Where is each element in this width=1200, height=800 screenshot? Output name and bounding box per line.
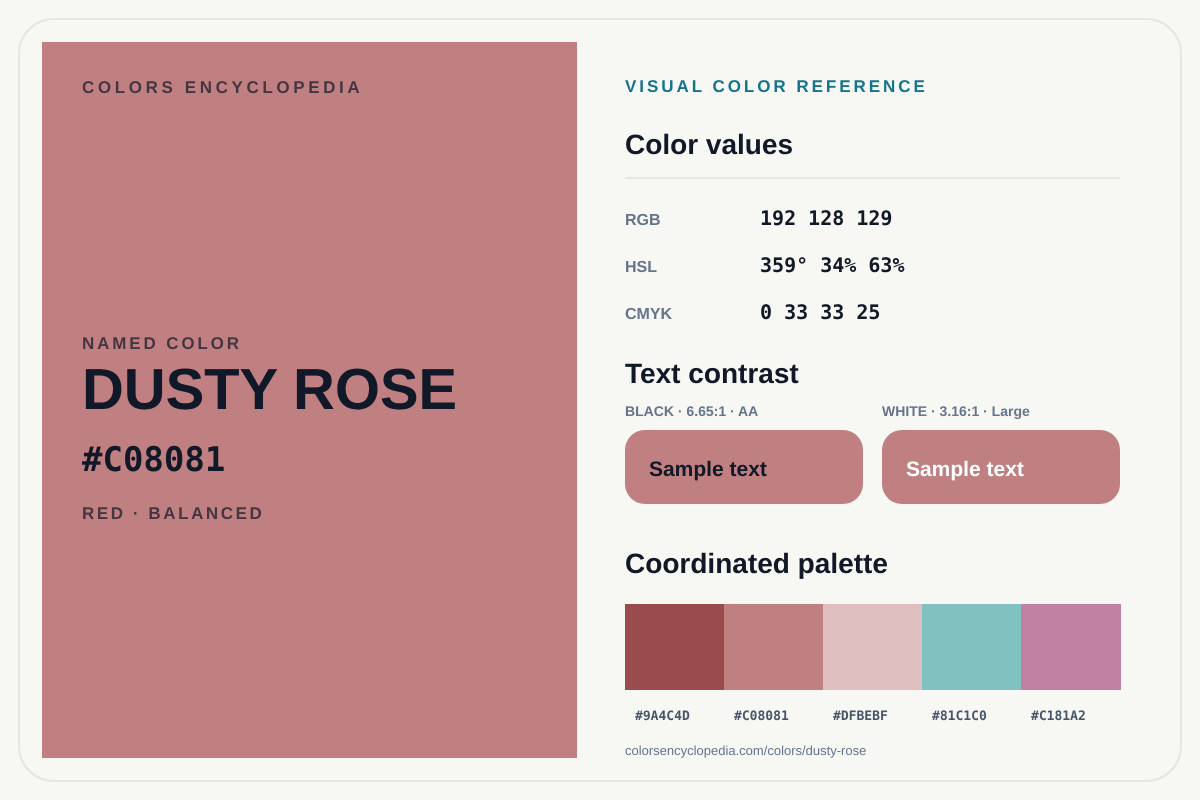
white sample text: Sample text	[906, 458, 1024, 481]
source url: colorsencyclopedia.com/colors/dusty-rose	[625, 743, 866, 758]
family and tone: RED · BALANCED	[82, 504, 264, 523]
palette hex labels	[635, 709, 1086, 724]
palette hex labels: #C08081	[734, 709, 789, 724]
hex code: #C08081	[82, 440, 225, 480]
color name: DUSTY ROSE	[82, 357, 457, 422]
CMYK row: 0 33 33 25	[760, 300, 880, 324]
palette hex labels: #DFBEBF	[833, 709, 888, 724]
heading: coordinated palette: Coordinated palette	[625, 548, 888, 579]
heading: text contrast: Text contrast	[625, 358, 799, 389]
CMYK row: CMYK	[625, 306, 672, 323]
palette hex labels: #C181A2	[1031, 709, 1086, 724]
divider	[625, 177, 1120, 179]
palette hex labels: #9A4C4D	[635, 709, 690, 724]
palette swatches	[625, 604, 1121, 690]
white sample box	[882, 430, 1120, 504]
named color label: NAMED COLOR	[82, 334, 242, 353]
CMYK row	[625, 300, 880, 324]
RGB row: 192 128 129	[760, 206, 892, 230]
white contrast caption: WHITE · 3.16:1 · Large	[882, 403, 1030, 419]
palette hex labels: #81C1C0	[932, 709, 987, 724]
black contrast caption: BLACK · 6.65:1 · AA	[625, 403, 758, 419]
HSL row: HSL	[625, 259, 657, 276]
black sample box	[625, 430, 863, 504]
black sample text: Sample text	[649, 458, 767, 481]
HSL row	[625, 253, 904, 277]
HSL row: 359° 34% 63%	[760, 253, 904, 277]
heading: color values: Color values	[625, 129, 793, 160]
eyebrow heading: VISUAL COLOR REFERENCE	[625, 77, 928, 96]
RGB row	[625, 206, 892, 230]
panel: color swatch	[42, 42, 577, 758]
brand label: COLORS ENCYCLOPEDIA	[82, 78, 363, 97]
RGB row: RGB	[625, 212, 661, 229]
